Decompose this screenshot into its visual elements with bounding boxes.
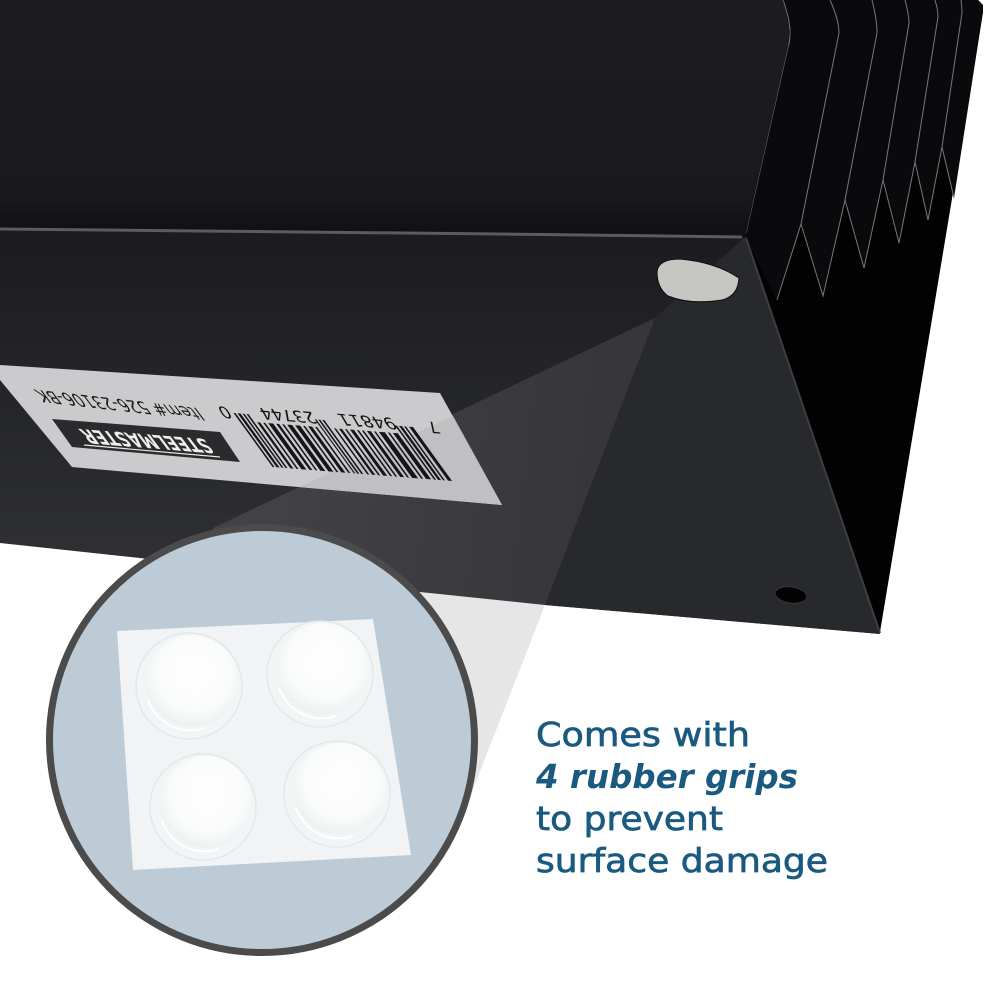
rubber grip 4 [284, 741, 390, 847]
callout beam over the white background [240, 592, 545, 810]
barcode number 23744: 23744 [255, 403, 320, 426]
caption: 4 rubber grips [535, 757, 798, 796]
label sticker [0, 365, 502, 505]
beam tint on label [299, 416, 502, 505]
folded edge highlight [0, 229, 742, 237]
rubber grip 3 [150, 754, 256, 860]
rubber grip 1 [136, 633, 242, 739]
caption [535, 715, 828, 880]
rubber grip 2 [267, 621, 373, 727]
fin edge lines [746, 0, 962, 300]
callout beam over the shelf [213, 318, 655, 740]
corner fold line [746, 238, 880, 633]
steelmaster logo: STEELMASTER [74, 424, 219, 457]
product label [0, 365, 502, 505]
barcode number 0: 0 [214, 402, 235, 421]
barcode number 7: 7 [423, 417, 443, 436]
rubber grip on shelf [657, 259, 739, 302]
shelf top face [0, 0, 790, 238]
zoom circle [50, 528, 474, 952]
caption: to prevent [536, 799, 723, 838]
shelf front face [0, 230, 880, 634]
mounting hole [774, 585, 808, 605]
circle background [50, 528, 474, 952]
adhesive sheet [117, 619, 411, 870]
right triangular face [545, 237, 880, 634]
barcode number 94811: 94811 [333, 409, 400, 432]
shelf black side with fins [745, 0, 983, 632]
caption: surface damage [536, 841, 828, 880]
steelmaster logo [52, 419, 240, 462]
barcode [234, 413, 452, 481]
caption: Comes with [536, 715, 750, 754]
